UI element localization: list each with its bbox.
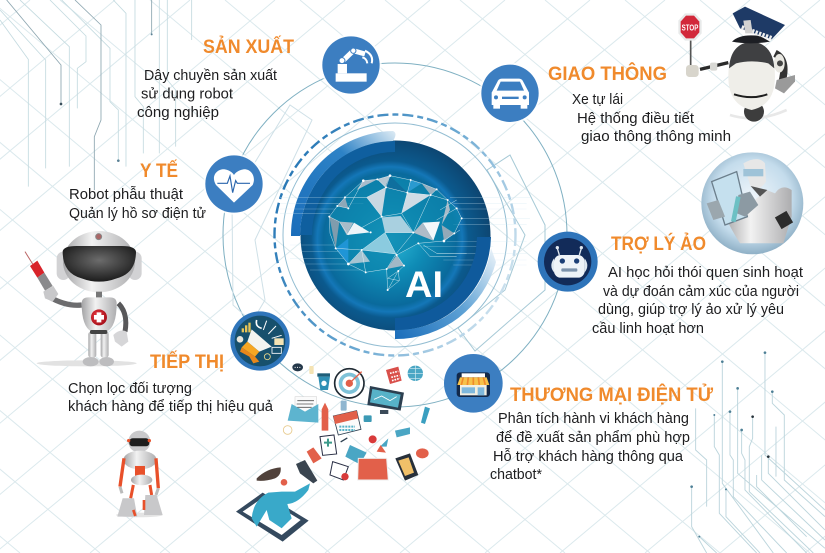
- central AI emblem: [274, 114, 530, 356]
- icon: first aid: [364, 415, 372, 422]
- text: traffic: Hệ thống điều tiết: [577, 111, 694, 127]
- inner dark band bottom right: [395, 237, 491, 330]
- text: traffic: [572, 92, 731, 145]
- text: marketing: Chọn lọc đối tượng: [68, 381, 192, 397]
- text: virtual assistant: AI học hỏi thói quen sinh hoạt: [608, 265, 803, 281]
- icon: healthcare heart: [203, 153, 265, 215]
- blue band bottom right: [395, 248, 496, 339]
- robot: traffic police with stop sign: STOP: [682, 23, 699, 32]
- icon: small envelope: [395, 427, 410, 437]
- icon: coffee cup: [317, 373, 330, 390]
- circuit traces: bottom right: [690, 351, 825, 553]
- text: manufacturing: [137, 68, 277, 121]
- icon: photo card: [358, 458, 388, 480]
- icon: chat bubble: [292, 363, 303, 371]
- heading: healthcare: Y TẾ: [140, 160, 178, 182]
- icon: arrow down: [377, 445, 386, 453]
- icon: calendar: [333, 411, 361, 435]
- text: healthcare: Quản lý hồ sơ điện tử: [69, 206, 206, 222]
- icon: globe: [408, 366, 423, 381]
- text: marketing: [68, 381, 274, 415]
- robot: assistant with tablet in sphere: [701, 152, 803, 254]
- icon: arrow up: [380, 438, 388, 447]
- icon: bottle: [309, 366, 314, 374]
- text: e-commerce: chatbot*: [490, 467, 542, 483]
- text: virtual assistant: cầu linh hoạt hơn: [592, 321, 704, 337]
- brain network: [328, 174, 467, 291]
- person emerging from phone: [236, 467, 310, 542]
- icon: balloon: [369, 435, 377, 443]
- text: e-commerce: [490, 411, 690, 483]
- text: virtual assistant: và dự đoán cảm xúc của người: [603, 284, 799, 300]
- dashed ring: [274, 114, 516, 356]
- robot: medical with syringe: [25, 231, 142, 366]
- text: marketing: khách hàng để tiếp thị hiệu quả: [68, 399, 274, 415]
- heading: e-commerce: THƯƠNG MẠI ĐIỆN TỬ: [510, 384, 713, 406]
- text: traffic: Xe tự lái: [572, 92, 623, 108]
- marketing cluster illustration: [236, 363, 430, 542]
- text: virtual assistant: [592, 265, 803, 337]
- text: manufacturing: Dây chuyền sản xuất: [144, 68, 277, 84]
- icon: pen: [341, 438, 347, 442]
- text: e-commerce: Phân tích hành vi khách hàng: [498, 411, 689, 427]
- icon: traffic car: [479, 63, 541, 124]
- robot: traffic police with stop sign: [678, 7, 795, 122]
- heading: marketing: TIẾP THỊ: [150, 351, 224, 373]
- icon: clock: [283, 426, 292, 434]
- text: healthcare: [69, 186, 206, 222]
- circuit traces: top left: [0, 0, 192, 190]
- text: e-commerce: để đề xuất sản phẩm phù hợp: [496, 430, 690, 446]
- core disc: [300, 140, 490, 330]
- icon: heart card: [345, 445, 367, 464]
- heading: traffic: GIAO THÔNG: [548, 63, 667, 85]
- icon: monitor: [367, 386, 404, 414]
- text: manufacturing: công nghiệp: [137, 105, 219, 121]
- icon: envelope with letter: [288, 397, 318, 423]
- icon: camera: [296, 460, 317, 483]
- inner dark band top left: [300, 141, 395, 235]
- icon: heart: [341, 473, 349, 480]
- icon: e-commerce storefront: [444, 354, 503, 413]
- icon: speech bubble: [416, 448, 429, 458]
- icon: calculator: [386, 367, 402, 384]
- connector ring: [223, 63, 567, 407]
- icon: target: [335, 369, 364, 398]
- text: manufacturing: sử dụng robot: [141, 86, 233, 102]
- robot: small red and white: [116, 431, 163, 517]
- text: traffic: giao thông thông minh: [581, 129, 731, 145]
- icon: tablet chart: [395, 453, 418, 481]
- text: virtual assistant: dùng, giúp trợ lý ảo xử lý yêu: [598, 302, 784, 318]
- icon: pencil: [322, 403, 328, 431]
- icon: virtual assistant bot: [538, 232, 598, 292]
- icon: marketing megaphone: [230, 311, 290, 371]
- heading: virtual assistant: TRỢ LÝ ẢO: [611, 233, 706, 255]
- outer thin ring: [283, 123, 507, 347]
- icon: document: [320, 435, 337, 455]
- AI label: AI: [405, 264, 443, 305]
- icon: small bottle: [341, 401, 347, 411]
- icon: manufacturing robot arm: [320, 34, 382, 96]
- icon: megaphone bell: [307, 447, 322, 463]
- heading: manufacturing: SẢN XUẤT: [203, 36, 294, 58]
- icon: marker: [421, 407, 430, 424]
- text: healthcare: Robot phẫu thuật: [69, 186, 183, 203]
- blue band top left: [291, 131, 396, 236]
- text: e-commerce: Hỗ trợ khách hàng thông qua: [493, 448, 684, 465]
- data lines: [280, 197, 530, 270]
- icon: heart rate card: [330, 462, 348, 480]
